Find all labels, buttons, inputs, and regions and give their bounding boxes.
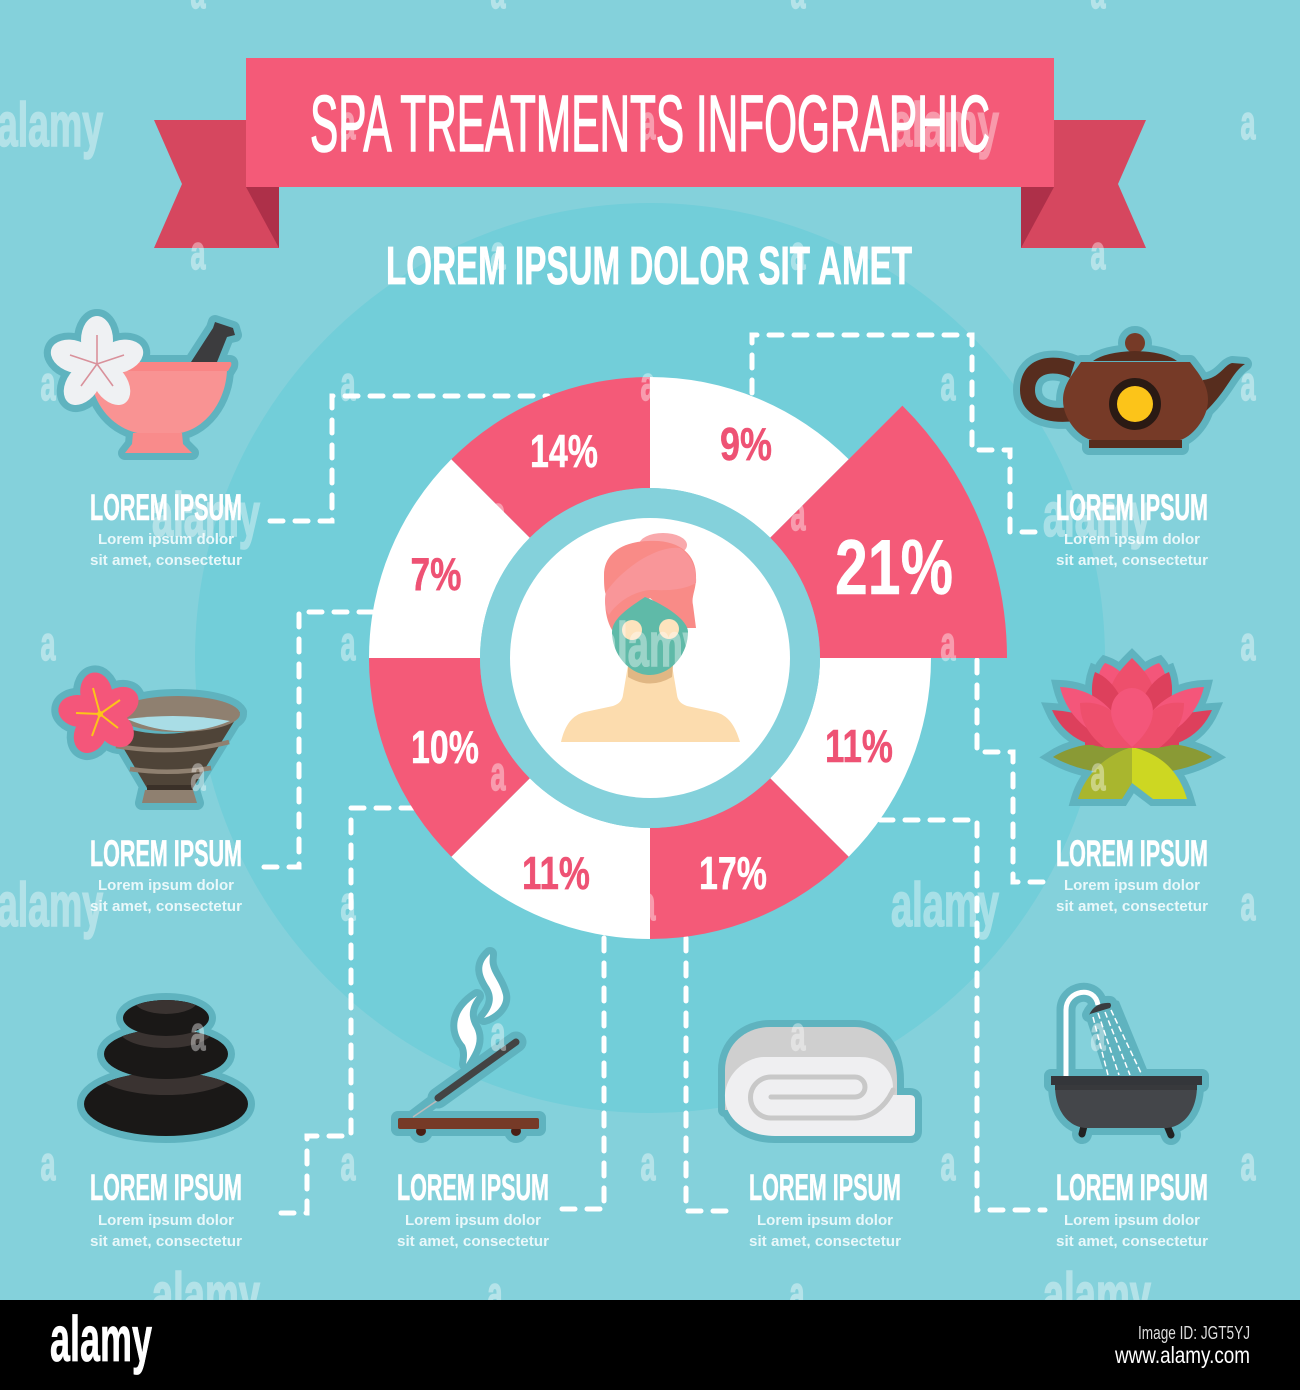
watermark overlay: a: [340, 1138, 356, 1191]
watermark overlay: a: [940, 1138, 956, 1191]
segment 17%: [650, 778, 849, 939]
icon: stacked stones: [84, 986, 248, 1136]
watermark overlay: a: [190, 227, 206, 280]
watermark overlay: a: [490, 1008, 506, 1061]
label: bowl: sit amet, consectetur: [90, 898, 242, 915]
watermark overlay: a: [1240, 358, 1256, 411]
watermark overlay: a: [790, 488, 806, 541]
percent labels: 10%: [411, 721, 479, 773]
watermark overlay: alamy: [596, 611, 704, 680]
label: incense: sit amet, consectetur: [397, 1233, 549, 1250]
icon: rolled towel: [725, 1027, 915, 1136]
watermark overlay: a: [490, 227, 506, 280]
watermark overlay: a: [1240, 97, 1256, 150]
label: teapot: [1056, 487, 1208, 569]
label: mortar: LOREM IPSUM: [90, 487, 242, 528]
label: towel: [749, 1167, 901, 1250]
label: bathtub: Lorem ipsum dolor: [1064, 1212, 1200, 1229]
icon: teapot: [1020, 333, 1245, 448]
watermark overlay: a: [940, 358, 956, 411]
label: stones: sit amet, consectetur: [90, 1233, 242, 1250]
watermark overlay: alamy: [152, 481, 260, 550]
label: stones: LOREM IPSUM: [90, 1167, 242, 1208]
watermark overlay: a: [490, 488, 506, 541]
icon: bowl and pink flower: [56, 670, 240, 803]
percent labels: 11%: [825, 720, 893, 772]
label: lotus: [1056, 833, 1208, 915]
watermark overlay: a: [1240, 618, 1256, 671]
label: bowl: Lorem ipsum dolor: [98, 877, 234, 894]
watermark overlay: a: [340, 97, 356, 150]
watermark overlay: alamy: [891, 91, 999, 160]
watermark overlay: a: [490, 748, 506, 801]
percent labels: 17%: [699, 847, 767, 899]
watermark overlay: a: [1240, 1138, 1256, 1191]
watermark overlay: a: [1090, 748, 1106, 801]
icon: mortar and flower: [46, 316, 235, 453]
watermark overlay: alamy: [1043, 481, 1151, 550]
segment 21% exploded: [770, 406, 1007, 658]
watermark overlay: a: [640, 97, 656, 150]
label: towel: Lorem ipsum dolor: [757, 1212, 893, 1229]
label: towel: sit amet, consectetur: [749, 1233, 901, 1250]
label: stones: [90, 1167, 242, 1250]
label: incense: LOREM IPSUM: [397, 1167, 549, 1208]
watermark overlay: alamy: [152, 1261, 260, 1330]
footer logo: alamy: [50, 1303, 152, 1375]
segment 9%: [650, 377, 849, 538]
segment 14%: [451, 377, 650, 538]
title banner: [154, 58, 1146, 248]
dashed connectors: [262, 335, 1047, 1213]
watermark overlay: a: [790, 1008, 806, 1061]
label: teapot: Lorem ipsum dolor: [1064, 531, 1200, 548]
watermark overlay: a: [1090, 227, 1106, 280]
watermark overlay: a: [640, 358, 656, 411]
watermark overlay: a: [190, 1008, 206, 1061]
percent labels: 21%: [835, 523, 953, 611]
percent labels: [410, 418, 953, 899]
label: mortar: sit amet, consectetur: [90, 552, 242, 569]
watermark overlay: a: [40, 358, 56, 411]
watermark overlay: alamy: [0, 871, 103, 940]
segment 11% right: [770, 658, 931, 857]
watermark overlay: a: [340, 878, 356, 931]
website: www.alamy.com: [1114, 1342, 1250, 1368]
watermark overlay: alamy: [1043, 1261, 1151, 1330]
watermark overlay: alamy: [0, 91, 103, 160]
icon: incense stick: [398, 954, 539, 1136]
watermark overlay: a: [1090, 1008, 1106, 1061]
label: stones: Lorem ipsum dolor: [98, 1212, 234, 1229]
percent labels: 9%: [720, 418, 772, 470]
percent labels: 14%: [530, 425, 598, 477]
inner ring: [480, 488, 820, 828]
watermark overlay: a: [790, 748, 806, 801]
label: teapot: sit amet, consectetur: [1056, 552, 1208, 569]
watermark overlay: a: [340, 358, 356, 411]
watermark overlay: a: [790, 1268, 805, 1321]
icon: woman with face mask: [561, 533, 740, 742]
label: mortar: [90, 487, 242, 569]
donut chart: [369, 377, 1007, 939]
watermark overlay: a: [40, 1138, 56, 1191]
segment 7%: [369, 459, 530, 658]
segment 10%: [369, 658, 530, 857]
watermark overlay: alamy: [891, 871, 999, 940]
label: bowl: [90, 833, 242, 915]
label: incense: Lorem ipsum dolor: [405, 1212, 541, 1229]
watermark overlay: a: [340, 618, 356, 671]
subtitle: LOREM IPSUM DOLOR SIT AMET: [386, 236, 912, 296]
label: mortar: Lorem ipsum dolor: [98, 531, 234, 548]
image id: Image ID: JGT5YJ: [1138, 1323, 1250, 1343]
label: incense: [397, 1167, 549, 1250]
label: bathtub: sit amet, consectetur: [1056, 1233, 1208, 1250]
percent labels: 7%: [410, 548, 462, 600]
footer bar: [0, 1300, 1300, 1390]
icon: lotus: [1052, 658, 1212, 799]
label: bathtub: [1056, 1167, 1208, 1250]
label: lotus: Lorem ipsum dolor: [1064, 877, 1200, 894]
label: bowl: LOREM IPSUM: [90, 833, 242, 874]
watermark overlay: a: [190, 748, 206, 801]
icon: bathtub with shower: [1051, 992, 1202, 1135]
segment 11% left: [451, 778, 650, 939]
label: lotus: sit amet, consectetur: [1056, 898, 1208, 915]
label: towel: LOREM IPSUM: [749, 1167, 901, 1208]
watermark overlay: a: [640, 878, 656, 931]
watermark overlay: a: [790, 227, 806, 280]
watermark overlay: a: [40, 618, 56, 671]
watermark overlay: a: [640, 1138, 656, 1191]
watermark overlay: a: [940, 618, 956, 671]
watermark overlay: a: [1240, 878, 1256, 931]
percent labels: 11%: [522, 847, 590, 899]
watermark overlay: a: [488, 1268, 503, 1321]
background circle: [195, 203, 1105, 1113]
